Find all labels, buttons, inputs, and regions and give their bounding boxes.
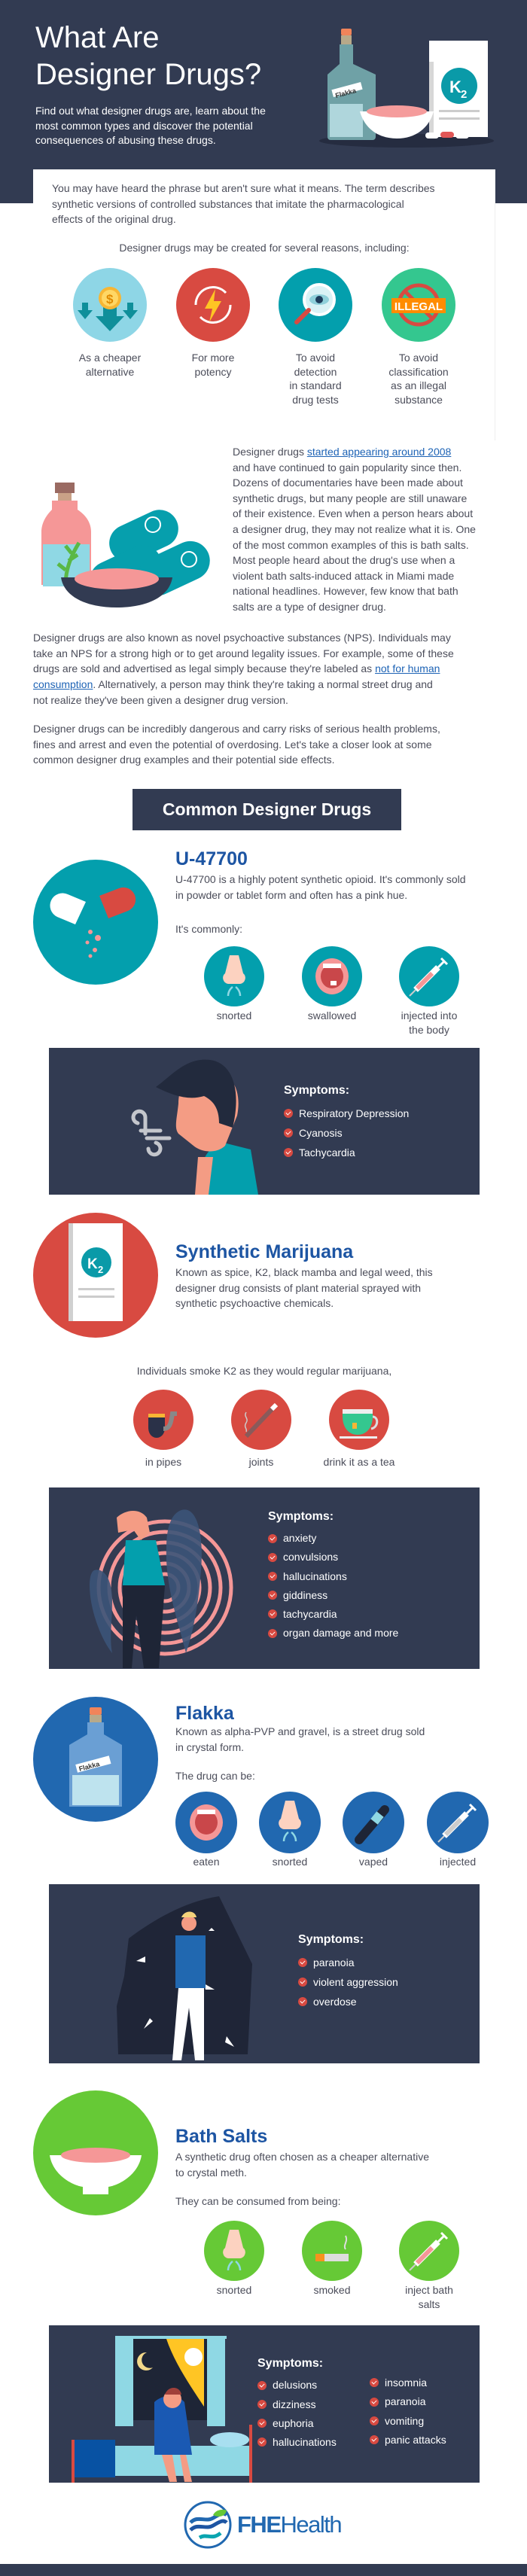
labels: eaten bbox=[193, 1856, 220, 1868]
symptoms list: Symptoms: bbox=[298, 1933, 364, 1946]
icon: Flakka bottle: Flakka bbox=[78, 1760, 101, 1773]
title: Synthetic Marijuana bbox=[175, 1241, 353, 1262]
description: A synthetic drug often chosen as a cheaper alternative bbox=[175, 2151, 429, 2163]
paragraph: NPS: consumption. Alternatively, a person may think they're taking a normal street drug and bbox=[33, 678, 433, 690]
description: Known as alpha-PVP and gravel, is a street drug sold bbox=[175, 1725, 425, 1737]
methods icons bbox=[204, 946, 264, 1006]
paragraph: NPS: not realize they've been given a designer drug version. bbox=[33, 694, 288, 706]
section: U-47700: the body bbox=[409, 1024, 449, 1036]
description bbox=[175, 1725, 425, 1753]
symptoms list: Tachycardia bbox=[299, 1146, 355, 1159]
reasons icons: classification bbox=[388, 366, 449, 378]
paragraph: NPS bbox=[33, 632, 454, 706]
banner: common designer drugs bbox=[133, 789, 401, 830]
symptoms list: Cyanosis bbox=[299, 1127, 343, 1139]
icon: cheaper: $ bbox=[106, 292, 114, 306]
methods icons bbox=[175, 1792, 237, 1853]
icon: K2 bag: K bbox=[87, 1256, 98, 1272]
icon: K2 bag bbox=[33, 1213, 158, 1338]
title: What Are bbox=[35, 21, 160, 54]
labels: snorted bbox=[217, 1009, 251, 1022]
paragraph: history: synthetic drugs, but many people are still unaware bbox=[233, 492, 467, 504]
section: Bath Salts bbox=[33, 2090, 459, 2310]
paragraph: dangers bbox=[33, 723, 440, 766]
title: Bath Salts bbox=[175, 2126, 267, 2147]
icon: detection bbox=[279, 268, 352, 342]
panel: Bath Salts symptoms bbox=[49, 2325, 480, 2483]
title: Flakka bbox=[175, 1703, 234, 1724]
symptoms list: convulsions bbox=[283, 1551, 338, 1563]
labels bbox=[78, 352, 142, 378]
logo: FHE Health: FHEHealth bbox=[237, 2511, 341, 2538]
hero illustration: drugs: 2 bbox=[461, 88, 467, 101]
paragraph: history: Dozens of documentaries have been made about bbox=[233, 477, 463, 489]
description: to crystal meth. bbox=[175, 2166, 247, 2179]
intro text: synthetic versions of controlled substances that imitate the pharmacological bbox=[52, 197, 404, 209]
methods icons bbox=[204, 2221, 264, 2281]
section: U-47700: It's commonly: bbox=[175, 923, 242, 935]
section: Flakka: injected bbox=[440, 1856, 476, 1868]
paragraph: history: national headlines. However, few know that bath bbox=[233, 585, 458, 597]
symptoms list: violent aggression bbox=[313, 1976, 398, 1988]
section: Flakka: The drug can be: bbox=[175, 1770, 255, 1782]
subtitle: most common types and discover the potential bbox=[35, 120, 253, 132]
symptoms list: tachycardia bbox=[283, 1608, 337, 1620]
description: in crystal form. bbox=[175, 1741, 244, 1753]
section: Synthetic Marijuana: Individuals smoke K2 as they would regular marijuana, bbox=[137, 1365, 391, 1377]
symptoms list: delusions bbox=[273, 2379, 317, 2391]
description: in powder or tablet form and often has a pink hue. bbox=[175, 889, 407, 901]
methods icons bbox=[133, 1390, 193, 1450]
title: U-47700 bbox=[175, 848, 248, 869]
subtitle: Find out what designer drugs are, learn about the bbox=[35, 105, 266, 117]
icon: cheaper bbox=[73, 268, 147, 342]
spa illustration bbox=[41, 483, 210, 607]
icon: bath salts bowl bbox=[33, 2090, 158, 2215]
paragraph: history: of the most common examples of this is bath salts. bbox=[233, 539, 469, 551]
labels: in pipes bbox=[145, 1456, 181, 1468]
section: Synthetic Marijuana: joints bbox=[249, 1456, 273, 1468]
icon: Flakka bottle bbox=[33, 1697, 158, 1822]
symptoms list: overdose bbox=[313, 1996, 357, 2008]
symptoms list bbox=[284, 1084, 409, 1159]
description: U-47700 is a highly potent synthetic opioid. It's commonly sold bbox=[175, 873, 466, 885]
subtitle bbox=[35, 105, 266, 146]
reasons icons: substance bbox=[394, 393, 443, 405]
illustration: sleepless man bbox=[72, 2336, 252, 2483]
section: Bath Salts: smoked bbox=[313, 2284, 351, 2296]
reasons icons bbox=[73, 268, 455, 406]
panel: U-47700 symptoms bbox=[49, 1048, 480, 1195]
hero illustration: drugs: Flakka bbox=[334, 87, 358, 99]
icon: capsule bbox=[33, 860, 158, 985]
symptoms list: euphoria bbox=[273, 2417, 313, 2429]
paragraph: dangers: Designer drugs can be incredibly dangerous and carry risks of serious health problems, bbox=[33, 723, 440, 735]
labels: snorted bbox=[217, 2284, 251, 2296]
section: U-47700 bbox=[33, 848, 466, 1036]
icon: potency bbox=[176, 268, 250, 342]
paragraph: history: Designer drugs started appearing around 2008 bbox=[233, 446, 451, 458]
paragraph: history bbox=[233, 446, 476, 613]
reasons icons: To avoid bbox=[296, 352, 335, 364]
intro card bbox=[33, 169, 495, 440]
section: U-47700: swallowed bbox=[308, 1009, 356, 1022]
symptoms list: Symptoms: bbox=[268, 1510, 334, 1523]
section: Bath Salts: inject bath bbox=[405, 2284, 453, 2296]
icon: illegal: ILLEGAL bbox=[394, 300, 443, 313]
paragraph: history: and have continued to gain popularity since then. bbox=[233, 461, 462, 473]
section: Flakka: snorted bbox=[273, 1856, 307, 1868]
symptoms list: paranoia bbox=[313, 1956, 354, 1969]
section: Bath Salts: salts bbox=[419, 2298, 440, 2310]
paragraph: NPS: take an NPS for a strong high or to get around legality issues. For example, some of these bbox=[33, 647, 454, 659]
reasons icons: potency bbox=[194, 366, 232, 378]
symptoms list: Symptoms: bbox=[257, 2357, 323, 2370]
logo: FHE Health bbox=[184, 2501, 341, 2549]
description: Known as spice, K2, black mamba and legal weed, this bbox=[175, 1266, 433, 1278]
banner: common designer drugs: Common Designer Drugs bbox=[163, 799, 371, 819]
description: designer drug consists of plant material sprayed with bbox=[175, 1282, 421, 1294]
panel: Bath Salts symptoms: paranoia bbox=[385, 2395, 426, 2407]
footer bar bbox=[0, 2564, 527, 2576]
section: U-47700: injected into bbox=[401, 1009, 457, 1022]
reasons icons: To avoid bbox=[399, 352, 438, 364]
description bbox=[175, 873, 466, 901]
intro text: effects of the original drug. bbox=[52, 213, 176, 225]
symptoms list: hallucinations bbox=[283, 1570, 347, 1582]
hero illustration: drugs: K bbox=[449, 78, 462, 96]
panel: Bath Salts symptoms: insomnia bbox=[385, 2377, 427, 2389]
symptoms list bbox=[257, 2357, 337, 2448]
paragraph: history: salts are a type of designer drug. bbox=[233, 601, 386, 613]
symptoms list bbox=[268, 1510, 398, 1639]
section: Flakka bbox=[33, 1697, 489, 1868]
reasons icons: detection bbox=[294, 366, 337, 378]
symptoms list: organ damage and more bbox=[283, 1627, 398, 1639]
description bbox=[175, 2151, 429, 2179]
section: Synthetic Marijuana: drink it as a tea bbox=[324, 1456, 394, 1468]
section: Flakka: vaped bbox=[359, 1856, 388, 1868]
reasons icons: as an illegal bbox=[391, 379, 446, 391]
section: Synthetic Marijuana bbox=[33, 1213, 433, 1468]
symptoms list bbox=[298, 1933, 398, 2008]
symptoms list: Respiratory Depression bbox=[299, 1107, 409, 1119]
title bbox=[35, 21, 261, 91]
paragraph: dangers: common designer drug examples and their potential side effects. bbox=[33, 754, 335, 766]
illustration: paranoid person with eyes bbox=[117, 1896, 252, 2060]
symptoms list: Symptoms: bbox=[284, 1084, 349, 1097]
intro text bbox=[52, 182, 435, 225]
reasons icons: For more bbox=[192, 352, 234, 364]
paragraph: history: a designer drug, they may not realize what it is. One bbox=[233, 523, 476, 535]
panel: Bath Salts symptoms: vomiting bbox=[385, 2415, 424, 2427]
symptoms list: anxiety bbox=[283, 1532, 316, 1544]
header background bbox=[0, 0, 527, 203]
paragraph: history: of their existence. Even when a person hears about bbox=[233, 507, 473, 519]
symptoms list: hallucinations bbox=[273, 2436, 337, 2448]
description bbox=[175, 1266, 433, 1309]
panel: Flakka symptoms bbox=[49, 1884, 480, 2063]
paragraph: dangers: fines and arrest and even the potential of overdosing. Let's take a closer look at some bbox=[33, 738, 432, 751]
reasons icons: in standard bbox=[289, 379, 342, 391]
illustration: spiral hallucination bbox=[90, 1510, 233, 1668]
paragraph: history: violent bath salts-induced attack in Miami made bbox=[233, 570, 454, 582]
paragraph: history: Most people heard about the drug's use when a bbox=[233, 554, 455, 566]
subtitle: consequences of abusing these drugs. bbox=[35, 134, 216, 146]
hero illustration: drugs bbox=[319, 29, 494, 148]
labels: As a cheaper bbox=[79, 352, 141, 364]
labels: alternative bbox=[86, 366, 134, 378]
intro text: You may have heard the phrase but aren't sure what it means. The term describes bbox=[52, 182, 435, 194]
reasons icons: drug tests bbox=[292, 393, 339, 405]
symptoms list: giddiness bbox=[283, 1589, 327, 1601]
icon: K2 bag: 2 bbox=[98, 1264, 103, 1275]
symptoms list: dizziness bbox=[273, 2398, 316, 2410]
paragraph: NPS: Designer drugs are also known as novel psychoactive substances (NPS). Individuals may bbox=[33, 632, 451, 644]
description: synthetic psychoactive chemicals. bbox=[175, 1297, 334, 1309]
section: Bath Salts: They can be consumed from being: bbox=[175, 2195, 340, 2207]
title: Designer Drugs? bbox=[35, 58, 261, 91]
panel: Synthetic Marijuana symptoms bbox=[49, 1487, 480, 1669]
illustration: person breathing bbox=[131, 1060, 258, 1195]
icon: illegal bbox=[382, 268, 455, 342]
panel: Bath Salts symptoms: panic attacks bbox=[385, 2434, 446, 2446]
paragraph: NPS: drugs are sold and advertised as legal simply because they're labeled as not for human bbox=[33, 662, 440, 674]
reasons heading: Designer drugs may be created for several reasons, including: bbox=[119, 242, 410, 254]
